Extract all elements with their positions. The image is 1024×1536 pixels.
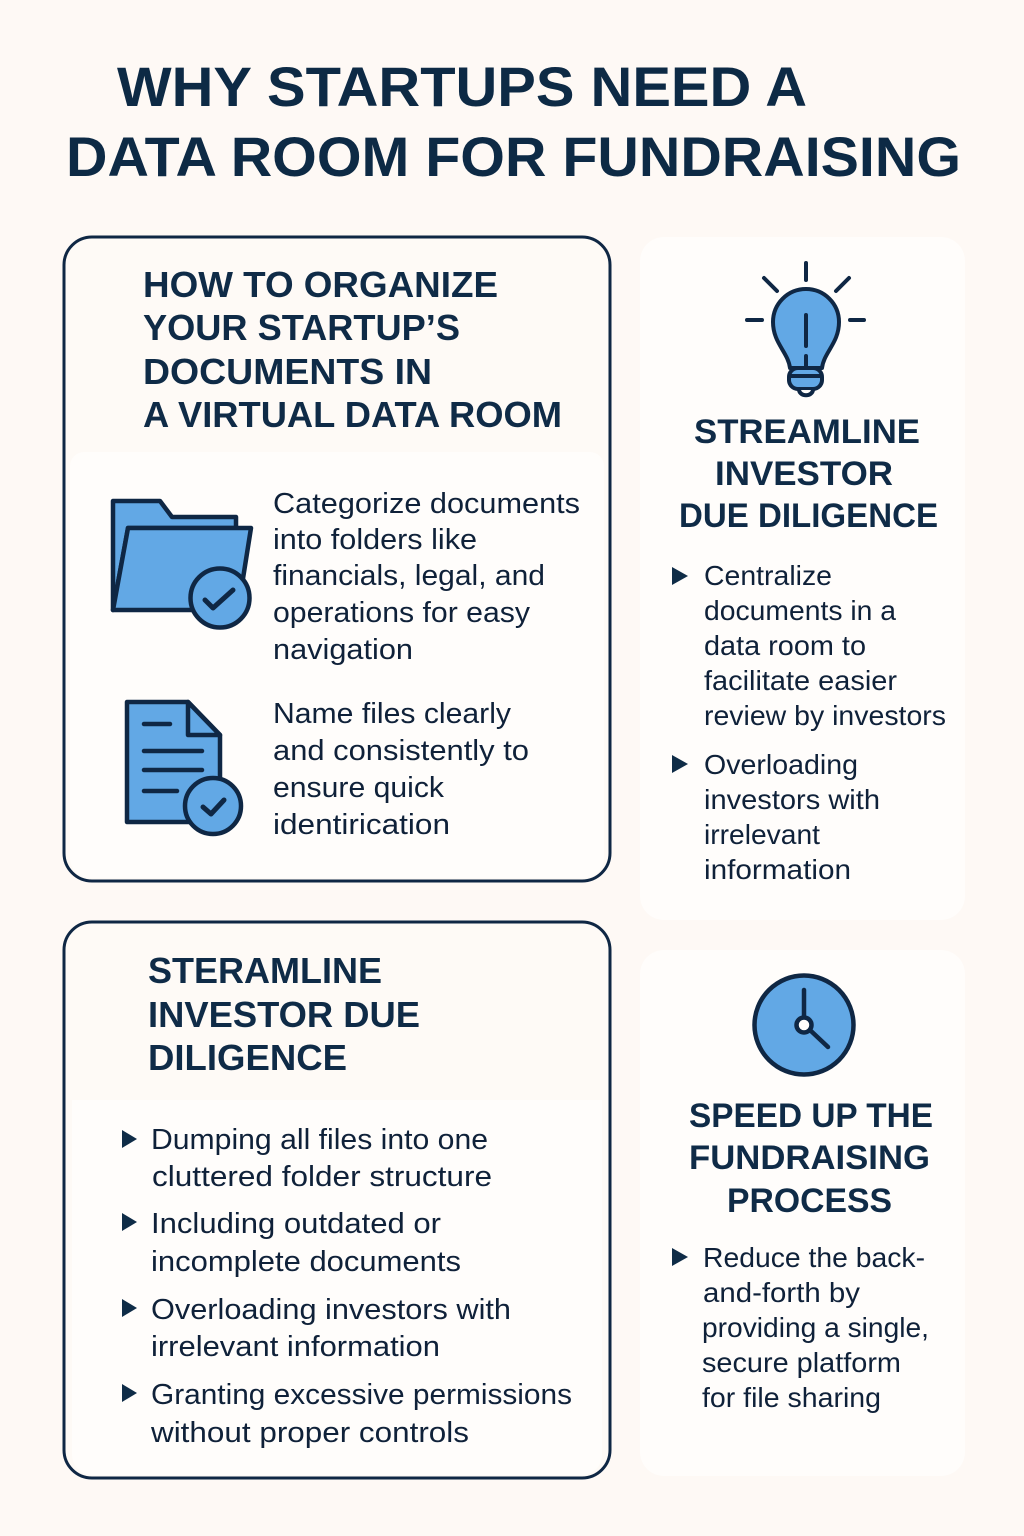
title: WHY STARTUPS NEED A xyxy=(117,55,807,118)
heading: streamline investor due diligence: DUE DILIGENCE xyxy=(679,497,938,535)
icon: light bulb xyxy=(747,263,864,395)
bullet: overloading investors: Overloading xyxy=(704,749,858,780)
heading: steramline: INVESTOR DUE xyxy=(148,994,420,1035)
bullet: excessive permissions: Granting excessive permissions xyxy=(151,1379,572,1411)
bullet: centralize documents: Centralize xyxy=(704,560,832,591)
bullet: overloading investors: investors with xyxy=(704,784,880,815)
heading: organize documents: HOW TO ORGANIZE xyxy=(143,264,498,305)
heading: streamline investor due diligence: STREAMLINE xyxy=(694,413,920,451)
bullet: dumping files: cluttered folder structure xyxy=(152,1161,492,1193)
text: categorize documents: financials, legal, and xyxy=(273,560,545,592)
bullet: centralize documents: review by investors xyxy=(704,700,946,731)
heading: speed up the fundraising process: FUNDRAISING xyxy=(689,1139,930,1177)
bullet: dumping files: Dumping all files into one xyxy=(151,1124,488,1156)
panel: speed up fundraising xyxy=(640,950,965,1476)
bullet: centralize documents: data room to xyxy=(704,630,866,661)
bullet: outdated documents: Including outdated or xyxy=(151,1208,441,1240)
text: name files: Name files clearly xyxy=(273,698,512,730)
bullet: overloading investors: irrelevant xyxy=(704,819,820,850)
bullet: overloading investors xyxy=(672,749,880,885)
icon: folder with check xyxy=(113,501,251,628)
text: name files: and consistently to xyxy=(273,735,529,767)
title: DATA ROOM FOR FUNDRAISING xyxy=(66,125,961,188)
icon: document with check xyxy=(127,702,241,834)
heading: steramline: STERAMLINE xyxy=(148,950,382,991)
bullet: overloading: irrelevant information xyxy=(151,1331,440,1363)
bullet: centralize documents: facilitate easier xyxy=(704,665,897,696)
bullet: reduce back-and-forth: for file sharing xyxy=(702,1382,881,1413)
text: name files: identirication xyxy=(273,809,450,841)
heading: organize documents xyxy=(143,264,562,435)
bullet: centralize documents xyxy=(672,560,946,731)
bullet: dumping files xyxy=(122,1124,492,1193)
bullet: centralize documents: documents in a xyxy=(704,595,897,626)
heading: organize documents: DOCUMENTS IN xyxy=(143,351,432,392)
bullet: reduce back-and-forth: and-forth by xyxy=(703,1277,860,1308)
heading: speed up the fundraising process: SPEED UP THE xyxy=(689,1097,933,1135)
heading: organize documents: YOUR STARTUP’S xyxy=(143,307,460,348)
bullet: outdated documents: incomplete documents xyxy=(151,1246,461,1278)
text: categorize documents: into folders like xyxy=(273,524,477,556)
title xyxy=(66,55,961,188)
heading: steramline: DILIGENCE xyxy=(148,1037,347,1078)
bullet: overloading investors: information xyxy=(704,854,851,885)
bullet: reduce back-and-forth xyxy=(672,1242,929,1413)
heading: streamline investor due diligence: INVESTOR xyxy=(715,455,893,493)
text: categorize documents: operations for easy xyxy=(273,597,531,629)
bullet: reduce back-and-forth: secure platform xyxy=(702,1347,901,1378)
text: categorize documents xyxy=(273,488,580,666)
text: categorize documents: navigation xyxy=(273,634,413,666)
heading: speed up the fundraising process: PROCESS xyxy=(727,1182,892,1220)
text: name files: ensure quick xyxy=(273,772,445,804)
heading: streamline investor due diligence xyxy=(679,413,938,535)
text: name files xyxy=(273,698,529,841)
heading: speed up the fundraising process xyxy=(689,1097,933,1220)
bullet: reduce back-and-forth: Reduce the back- xyxy=(703,1242,925,1273)
panel: steramline investor due diligence (left) xyxy=(64,922,610,1478)
icon: clock xyxy=(754,976,854,1074)
text: categorize documents: Categorize documents xyxy=(273,488,580,520)
panel: streamline investor due diligence (right) xyxy=(640,237,965,920)
bullet: overloading xyxy=(122,1294,511,1363)
bullet: excessive permissions: without proper controls xyxy=(150,1417,469,1449)
bullet: excessive permissions xyxy=(122,1379,572,1449)
bullet: outdated documents xyxy=(122,1208,461,1278)
panel: organize documents xyxy=(64,237,610,881)
heading: steramline xyxy=(148,950,420,1078)
bullet: overloading: Overloading investors with xyxy=(151,1294,511,1326)
heading: organize documents: A VIRTUAL DATA ROOM xyxy=(143,394,562,435)
bullet: reduce back-and-forth: providing a single, xyxy=(702,1312,929,1343)
